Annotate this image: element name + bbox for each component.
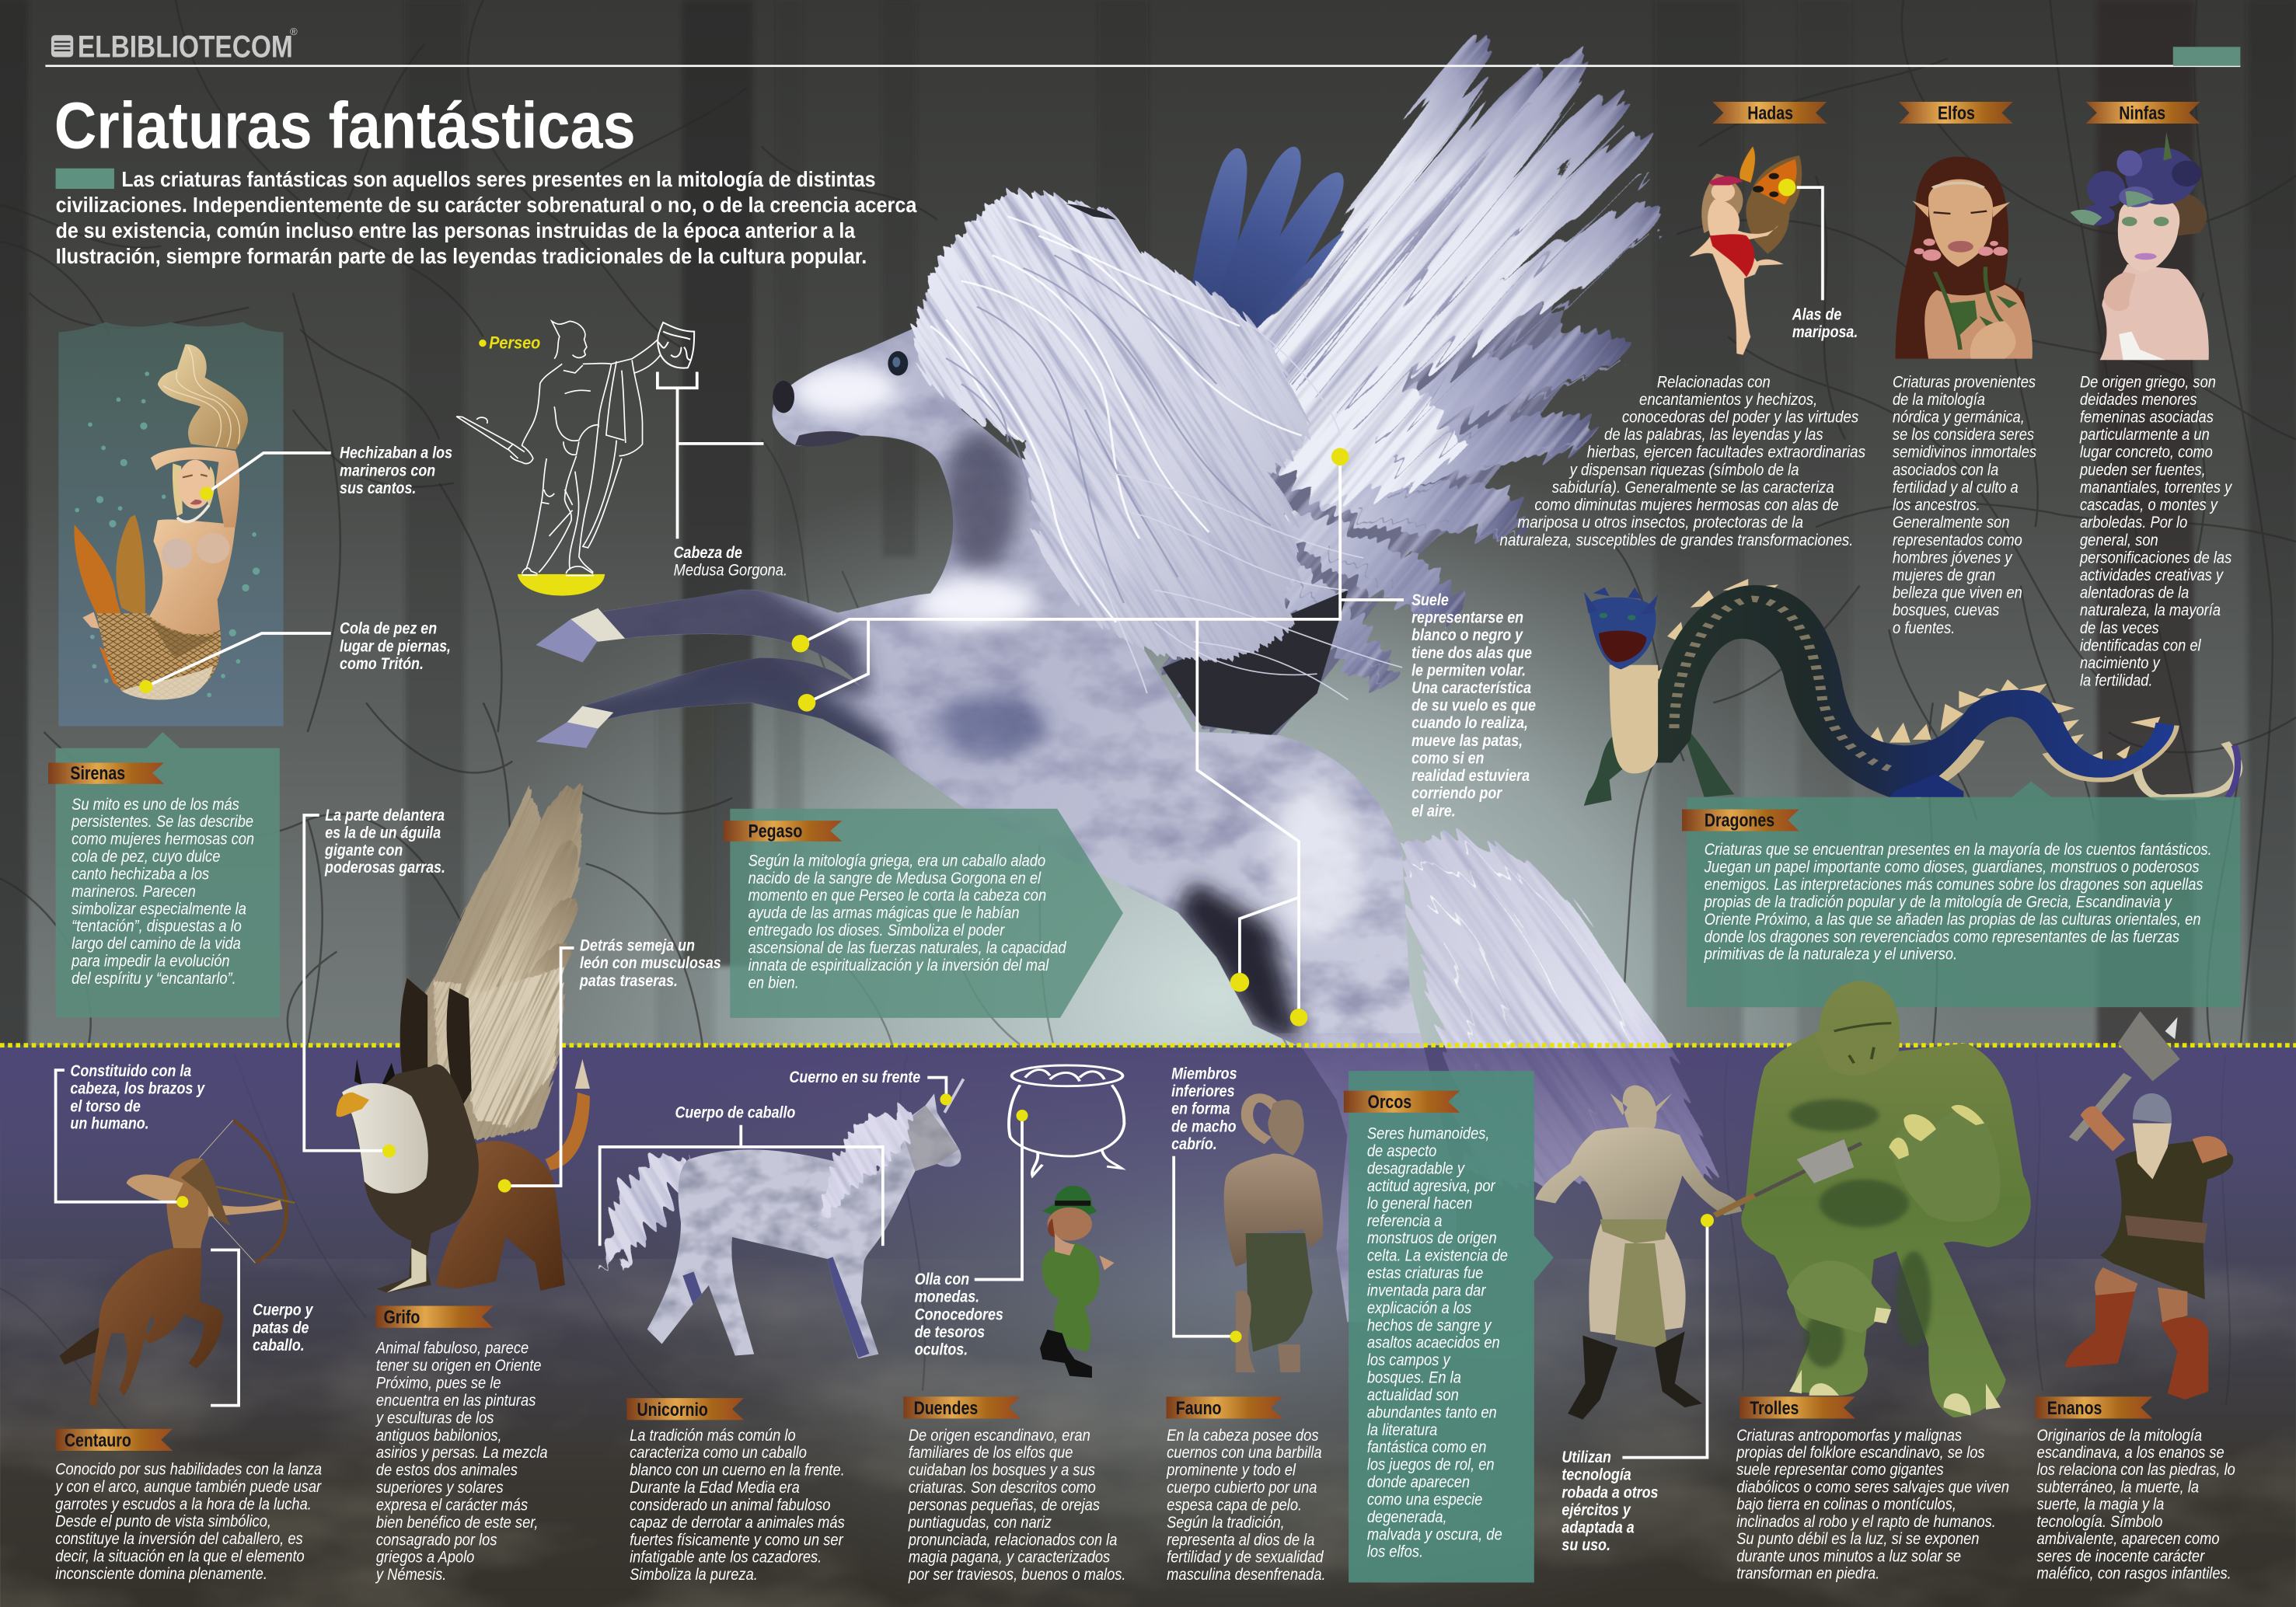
callout: suele representarse: blanco o negro y <box>1411 626 1523 645</box>
panel text: grifo: expresa el carácter más <box>376 1496 528 1515</box>
panel: orcos: los juegos de rol, en <box>1367 1455 1495 1474</box>
panel: pegaso: innata de espiritualización y la inversión del mal <box>748 957 1049 974</box>
orco callout: adaptada a <box>1561 1518 1635 1537</box>
panel text: enanos: ambivalente, aparecen como <box>2037 1530 2220 1549</box>
panel text: trolles: Su punto débil es la luz, si se exponen <box>1736 1530 1979 1549</box>
grifo callouts: gigante con <box>324 842 403 860</box>
text: hadas: como diminutas mujeres hermosas con alas de <box>1534 496 1839 514</box>
panel: orcos <box>1344 1071 1554 1583</box>
sirena callouts: Hechizaban a los <box>340 444 452 462</box>
panel text: centauro: Desde el punto de vista simbólico, <box>55 1513 271 1531</box>
callout: suele representarse: realidad estuviera <box>1411 767 1530 785</box>
elfos column: o fuentes. <box>1893 619 1955 637</box>
panel text: duendes <box>903 1396 1126 1584</box>
elfos column: Generalmente son <box>1893 514 2010 532</box>
elfos column: Criaturas provenientes <box>1893 373 2036 392</box>
panel text: unicornio: Unicornio <box>637 1399 708 1420</box>
panel: sirenas: Su mito es uno de los más <box>72 796 239 814</box>
panel text: grifo: antiguos babilonios, <box>376 1427 502 1445</box>
perseo line drawing <box>456 321 694 596</box>
ninfas column: arboledas. Por lo <box>2080 514 2187 532</box>
intro text: de su existencia, común incluso entre las personas instruidas de la época anterior a la <box>56 218 856 242</box>
panel text: centauro: decir, la situación en la que el elemento <box>55 1547 305 1566</box>
callout: suele representarse: le permiten volar. <box>1411 661 1526 680</box>
panel: sirenas: como mujeres hermosas con <box>72 830 254 849</box>
panel text: centauro: constituye la inversión del caballero, es <box>55 1530 303 1549</box>
panel text: grifo: superiores y solares <box>376 1479 504 1497</box>
panel text: grifo: y Némesis. <box>375 1566 446 1584</box>
panel text: unicornio: blanco con un cuerno en la frente. <box>630 1461 845 1480</box>
panel text: fauno: representa al dios de la <box>1167 1531 1314 1549</box>
panel: orcos: los campos y <box>1367 1351 1451 1370</box>
olla y duende illustration <box>1009 1065 1124 1378</box>
grifo callouts: león con musculosas <box>580 954 721 973</box>
panel: orcos: actitud agresiva, por <box>1367 1177 1496 1195</box>
elfos column: belleza que viven en <box>1893 584 2022 602</box>
orco callout <box>1561 1214 1714 1555</box>
panel: pegaso: momento en que Perseo le corta la cabeza con <box>748 887 1046 905</box>
orco callout: robada a otros <box>1561 1483 1659 1502</box>
panel text: fauno: cuerpo cubierto por una <box>1167 1479 1317 1497</box>
panel text: centauro: inconsciente domina plenamente. <box>55 1565 267 1583</box>
callout: suele representarse: representarse en <box>1411 608 1523 627</box>
icon: elfo <box>1896 157 2033 359</box>
sirena callouts: lugar de piernas, <box>340 637 451 656</box>
orco callout: ejércitos y <box>1561 1501 1631 1519</box>
panel text: centauro: Conocido por sus habilidades con la lanza <box>55 1460 322 1479</box>
sirena callouts: marineros con <box>340 462 435 480</box>
olla callouts <box>915 1110 1028 1359</box>
panel text: duendes: pronunciada, relacionados con la <box>908 1531 1117 1549</box>
text: hadas: naturaleza, susceptibles de grandes transformaciones. <box>1500 531 1853 549</box>
unicornio callouts <box>600 1068 952 1246</box>
ninfas column: De origen griego, son <box>2080 373 2216 392</box>
callout: suele representarse: Una característica <box>1411 679 1531 697</box>
panel text: enanos: suerte, la magia y la <box>2037 1495 2164 1514</box>
panel: orcos: donde aparecen <box>1367 1473 1470 1491</box>
ninfas column: deidades menores <box>2080 391 2197 409</box>
back blue wing <box>1171 140 1386 418</box>
panel text: grifo: bien benéfico de este ser, <box>376 1514 538 1532</box>
panel text: fauno: masculina desenfrenada. <box>1167 1566 1326 1584</box>
panel: pegaso: Pegaso <box>748 821 802 842</box>
panel text: fauno: En la cabeza posee dos <box>1167 1427 1319 1445</box>
olla callouts: ocultos. <box>915 1340 968 1359</box>
panel: orcos: lo general hacen <box>1367 1194 1472 1213</box>
panel text: duendes: magia pagana, y caracterizados <box>909 1548 1110 1567</box>
olla callouts: Conocedores <box>915 1305 1003 1324</box>
grifo callouts: es la de un águila <box>325 824 441 842</box>
callout: suele representarse: cuando lo realiza, <box>1411 714 1528 733</box>
centauro callouts: caballo. <box>253 1337 305 1354</box>
orco callout: tecnología <box>1561 1466 1631 1484</box>
panel: dragones: Juegan un papel importante como dioses, guardianes, monstruos o poderosos <box>1704 858 2200 877</box>
centauro callouts: un humano. <box>70 1114 149 1133</box>
ninfas column: nacimiento y <box>2080 654 2161 672</box>
panel: orcos: inventada para dar <box>1367 1281 1487 1300</box>
panel text: grifo: Animal fabuloso, parece <box>375 1339 529 1358</box>
grifo callouts: La parte delantera <box>325 807 445 824</box>
panel text: trolles: transforman en piedra. <box>1736 1564 1879 1583</box>
purple overlay band <box>0 1048 2296 1487</box>
ninfas column: naturaleza, la mayoría <box>2080 601 2221 620</box>
elfos column: semidivinos inmortales <box>1893 444 2036 462</box>
elfos column <box>1893 102 2036 637</box>
elfos column: nórdica y germánica, <box>1893 408 2025 427</box>
text: hadas: de las palabras, las leyendas y las <box>1604 425 1823 444</box>
ninfas column: personificaciones de las <box>2079 549 2231 567</box>
panel: dragones: Oriente Próximo, a las que se añaden las propias de las culturas orientales, en <box>1705 911 2201 929</box>
orco callout: Utilizan <box>1561 1448 1611 1466</box>
callout: cabeza de medusa: Medusa Gorgona. <box>674 561 787 580</box>
text: hadas: Relacionadas con <box>1657 372 1771 391</box>
unicornio callouts: Cuerpo de caballo <box>675 1103 795 1122</box>
text: hadas: conocedoras del poder y las virtudes <box>1622 408 1859 427</box>
fauno callouts: inferiores <box>1171 1082 1235 1100</box>
panel text: trolles: Criaturas antropomorfas y malignas <box>1736 1427 1962 1445</box>
panel text: duendes: De origen escandinavo, eran <box>909 1427 1090 1445</box>
panel text: unicornio: Durante la Edad Media era <box>630 1479 800 1497</box>
grifo callouts: Detrás semeja un <box>580 936 695 955</box>
panel: pegaso: entregado los dioses. Simboliza el poder <box>748 922 1006 939</box>
ninfas column: cascadas, o montes y <box>2080 496 2218 514</box>
panel: pegaso: en bien. <box>748 974 799 992</box>
panel: orcos: Orcos <box>1368 1091 1411 1113</box>
panel text: unicornio: La tradición más común lo <box>630 1427 796 1445</box>
panel: orcos: actualidad son <box>1367 1386 1459 1404</box>
panel: dragones: Criaturas que se encuentran presentes en la mayoría de los cuentos fantásticos. <box>1705 841 2212 859</box>
panel text: grifo: griegos a Apolo <box>376 1548 474 1567</box>
ninfas column: la fertilidad. <box>2080 671 2153 690</box>
panel: sirenas: canto hechizaba a los <box>72 865 209 884</box>
panel text: fauno: Según la tradición, <box>1167 1514 1285 1532</box>
hadas column: Hadas <box>1747 102 1793 124</box>
panel text: grifo: asirios y persas. La mezcla <box>376 1444 548 1462</box>
panel text: grifo: tener su origen en Oriente <box>376 1357 541 1375</box>
elfos column: mujeres de gran <box>1893 566 1995 584</box>
panel: orcos: malvada y oscura, de <box>1367 1525 1502 1544</box>
panel text: trolles <box>1736 1396 2009 1583</box>
fauno callouts <box>1171 1065 1242 1343</box>
title: Criaturas fantásticas <box>54 88 636 162</box>
panel: sirenas: Sirenas <box>70 762 125 784</box>
elfos column: de la mitología <box>1893 391 1985 409</box>
centauro callouts: el torso de <box>70 1097 141 1116</box>
panel text: trolles: Trolles <box>1750 1397 1799 1418</box>
panel: dragones: donde los dragones son reverenciados como representantes de las fuerzas <box>1705 928 2179 946</box>
panel: orcos: la literatura <box>1367 1421 1437 1439</box>
callout: suele representarse: el aire. <box>1411 802 1456 821</box>
panel text: duendes: puntiagudas, con nariz <box>908 1514 1052 1532</box>
ninfas column: alentadoras de la <box>2080 584 2189 602</box>
panel text: centauro: Centauro <box>65 1429 131 1451</box>
panel text: centauro <box>54 1429 322 1583</box>
sirena illustration panel <box>58 322 284 726</box>
panel text: enanos: subterráneo, la muerte, la <box>2037 1478 2199 1497</box>
sirena callouts: Cola de pez en <box>340 619 437 638</box>
panel: sirenas: largo del camino de la vida <box>72 935 241 953</box>
header rule and tab <box>45 47 2240 66</box>
sirena callouts <box>139 444 452 693</box>
pegaso illustration <box>497 0 2021 1376</box>
intro text: civilizaciones. Independientemente de su carácter sobrenatural o no, o de la creencia acerca <box>56 193 917 217</box>
fauno callouts: de macho <box>1171 1117 1237 1136</box>
elfos column: fertilidad y al culto a <box>1893 479 2019 497</box>
header: logo: ELBIBLIOTECOM <box>78 30 293 64</box>
ninfas column: general, son <box>2080 532 2158 549</box>
panel text: fauno: fertilidad y de sexualidad <box>1167 1548 1324 1567</box>
yellow dashed divider <box>0 1044 2296 1047</box>
panel: orcos: de aspecto <box>1367 1142 1436 1160</box>
panel text: duendes: cuidaban los bosques y a sus <box>909 1461 1095 1480</box>
panel text: fauno: cuernos con una barbilla <box>1167 1444 1322 1462</box>
panel text: grifo: Grifo <box>384 1306 420 1328</box>
ninfas column: particularmente a un <box>2079 426 2210 444</box>
fauno callouts: en forma <box>1171 1100 1230 1118</box>
callout: suele representarse: de su vuelo es que <box>1411 696 1536 715</box>
text: hadas: sabiduría). Generalmente se las caracteriza <box>1552 478 1834 497</box>
ninfas column <box>2071 102 2232 690</box>
panel: sirenas: persistentes. Se las describe <box>71 813 253 831</box>
hadas column <box>1500 102 1865 549</box>
ninfas column: lugar concreto, como <box>2080 444 2213 462</box>
panel text: unicornio: capaz de derrotar a animales más <box>630 1514 845 1532</box>
panel text: grifo: y esculturas de los <box>375 1409 494 1427</box>
unicornio callouts: Cuerno en su frente <box>789 1068 920 1087</box>
intro text <box>56 167 917 268</box>
troll illustration <box>1715 981 2031 1417</box>
panel text: centauro: y con el arco, aunque también puede usar <box>54 1478 322 1496</box>
panel text: fauno: prominente y todo el <box>1166 1461 1296 1480</box>
panel: orcos: explicación a los <box>1367 1299 1471 1317</box>
ninfas column: Ninfas <box>2119 102 2165 124</box>
panel text: unicornio: considerado un animal fabuloso <box>630 1496 830 1515</box>
callout: suele representarse: tiene dos alas que <box>1411 643 1532 662</box>
centauro callouts: Cuerpo y <box>253 1301 314 1319</box>
panel text: grifo: de estos dos animales <box>376 1461 518 1480</box>
icon: hada <box>1689 146 1802 355</box>
panel: orcos: estas criaturas fue <box>1367 1264 1483 1282</box>
panel: orcos: desagradable y <box>1367 1159 1465 1178</box>
panel: sirenas: “tentación”, dispuestas a lo <box>72 918 242 936</box>
callout: cabeza de medusa: Cabeza de <box>674 543 742 562</box>
panel text: enanos: Originarios de la mitología <box>2037 1427 2202 1445</box>
panel: orcos: monstruos de origen <box>1367 1229 1497 1248</box>
panel: dragones <box>1682 781 2240 1007</box>
grifo callouts: patas traseras. <box>579 971 678 990</box>
icon: ninfa <box>2071 132 2209 360</box>
enano illustration <box>2065 1011 2233 1400</box>
pegaso callout lines <box>792 448 1404 1027</box>
panel: orcos: celta. La existencia de <box>1367 1246 1508 1265</box>
grifo callouts <box>304 807 721 1192</box>
panel text: trolles: durante unos minutos a luz solar se <box>1736 1547 1961 1566</box>
grifo callouts: poderosas garras. <box>324 858 445 877</box>
olla callouts: Olla con <box>915 1271 969 1289</box>
panel: orcos: fantástica como en <box>1367 1438 1486 1457</box>
sirena callouts: sus cantos. <box>340 479 416 497</box>
panel text: enanos: seres de inocente carácter <box>2037 1547 2205 1566</box>
panel: pegaso: Según la mitología griega, era un caballo alado <box>748 852 1045 870</box>
panel text: unicornio: fuertes físicamente y como un ser <box>630 1531 844 1549</box>
elfos column: Elfos <box>1938 102 1975 124</box>
orco illustration <box>1535 1086 1742 1420</box>
elfos column: los ancestros. <box>1893 496 1980 514</box>
panel text: enanos: escandinava, a los enanos se <box>2037 1444 2224 1462</box>
panel: pegaso: ascensional de las fuerzas naturales, la capacidad <box>748 939 1066 957</box>
panel: orcos: Seres humanoides, <box>1367 1124 1490 1143</box>
olla callouts: de tesoros <box>915 1323 985 1341</box>
elfos column: bosques, cuevas <box>1893 601 1999 620</box>
label: perseo: Perseo <box>489 333 540 352</box>
panel: sirenas <box>48 732 280 1017</box>
panel text: unicornio: infatigable ante los cazadores. <box>630 1548 822 1567</box>
panel text: enanos: maléfico, con rasgos infantiles. <box>2037 1564 2231 1583</box>
panel text: fauno: espesa capa de pelo. <box>1167 1496 1302 1515</box>
panel: pegaso: ayuda de las armas mágicas que le habían <box>748 904 1020 922</box>
panel text: trolles: propias del folklore escandinavo, se los <box>1736 1444 1985 1462</box>
elfos column: representados como <box>1893 532 2022 549</box>
panel: dragones: enemigos. Las interpretaciones más comunes sobre los dragones son aquellas <box>1705 876 2204 894</box>
centauro callouts: patas de <box>252 1319 309 1337</box>
fauno callouts: Miembros <box>1171 1065 1237 1083</box>
panel: orcos: degenerada, <box>1367 1508 1447 1526</box>
panel: sirenas: para impedir la evolución <box>71 952 230 971</box>
panel: pegaso <box>724 809 1123 1018</box>
panel text: unicornio: Simboliza la pureza. <box>630 1566 758 1584</box>
callout: suele representarse: corriendo por <box>1411 784 1502 803</box>
panel: pegaso: nacido de la sangre de Medusa Gorgona en el <box>748 870 1042 887</box>
fauno callouts: cabrío. <box>1171 1135 1217 1153</box>
olla callouts: monedas. <box>915 1288 979 1306</box>
panel: sirenas: del espíritu y “encantarlo”. <box>72 970 236 988</box>
text: hadas: mariposa u otros insectos, protectoras de la <box>1517 513 1803 532</box>
panel: orcos: asaltos acaecidos en <box>1367 1333 1500 1352</box>
panel: dragones: Dragones <box>1705 809 1774 831</box>
panel: sirenas: cola de pez, cuyo dulce <box>72 848 220 866</box>
elfos column: hombres jóvenes y <box>1893 549 2013 567</box>
text: hadas: encantamientos y hechizos, <box>1639 390 1817 409</box>
elfos column: se los considera seres <box>1893 426 2034 444</box>
grifo illustration <box>278 712 732 1292</box>
hadas column: mariposa. <box>1792 323 1858 342</box>
panel: sirenas: marineros. Parecen <box>72 883 196 901</box>
callout: suele representarse: Suele <box>1411 591 1449 609</box>
panel text: trolles: bajo tierra en colinas o montículos, <box>1736 1495 1956 1514</box>
panel: dragones: propias de la tradición popular y de la mitología de Grecia, Escandinavia y <box>1704 893 2172 912</box>
panel text: duendes: personas pequeñas, de orejas <box>908 1496 1100 1515</box>
panel text: enanos <box>2036 1396 2235 1583</box>
panel: orcos: bosques. En la <box>1367 1368 1461 1387</box>
panel: orcos: hechos de sangre y <box>1367 1316 1492 1335</box>
panel text: unicornio <box>626 1398 845 1584</box>
header: logo: ® <box>290 26 298 37</box>
panel text: duendes: por ser traviesos, buenos o malos. <box>908 1566 1126 1584</box>
panel text: duendes: Duendes <box>914 1397 978 1418</box>
ninfas column: pueden ser fuentes, <box>2079 461 2206 479</box>
panel text: fauno <box>1166 1396 1326 1584</box>
panel text: enanos: los relaciona con las piedras, lo <box>2037 1461 2235 1480</box>
panel text: grifo: Próximo, pues se le <box>376 1374 501 1393</box>
panel text: fauno: Fauno <box>1176 1397 1222 1418</box>
callout: suele representarse: como si en <box>1411 749 1484 768</box>
panel: orcos: referencia a <box>1367 1212 1442 1230</box>
panel: orcos: como una especie <box>1367 1490 1482 1509</box>
elfos column: asociados con la <box>1893 461 1998 479</box>
ninfas column: actividades creativas y <box>2080 566 2224 584</box>
front wing <box>815 0 2021 987</box>
ninfas column: femeninas asociadas <box>2080 408 2214 427</box>
panel text: duendes: criaturas. Son descritos como <box>909 1479 1096 1497</box>
panel text: centauro: garrotes y escudos a la hora de la lucha. <box>55 1495 312 1514</box>
centauro callouts: Constituido con la <box>70 1062 191 1080</box>
tail <box>1241 690 1880 1332</box>
centauro callouts: cabeza, los brazos y <box>70 1079 205 1098</box>
centauro illustration <box>60 1121 295 1407</box>
panel text: unicornio: caracteriza como un caballo <box>630 1444 807 1462</box>
ninfas column: de las veces <box>2080 619 2159 637</box>
intro text: Ilustración, siempre formarán parte de las leyendas tradicionales de la cultura popular. <box>56 244 867 268</box>
ninfas column: identificadas con el <box>2080 636 2201 655</box>
panel: orcos: los elfos. <box>1367 1543 1423 1561</box>
intro text: Las criaturas fantásticas son aquellos seres presentes en la mitología de distintas <box>121 167 876 191</box>
panel text: enanos: Enanos <box>2047 1397 2102 1418</box>
unicornio illustration <box>598 1079 965 1358</box>
panel text: enanos: tecnología. Símbolo <box>2037 1513 2162 1531</box>
panel text: trolles: diabólicos o como seres salvajes que viven <box>1736 1478 2009 1497</box>
text: hadas <box>1500 372 1865 549</box>
text: hadas: hierbas, ejercen facultades extraordinarias <box>1587 443 1865 462</box>
dragon illustration <box>1584 579 2238 806</box>
text: hadas: y dispensan riquezas (símbolo de la <box>1568 460 1799 479</box>
callout: cabeza de medusa <box>658 372 787 580</box>
hadas column: Alas de <box>1792 305 1841 324</box>
sirena callouts: como Tritón. <box>340 655 424 673</box>
panel text: grifo: encuentra en las pinturas <box>376 1392 536 1410</box>
centauro callouts <box>56 1062 314 1406</box>
panel: sirenas: simbolizar especialmente la <box>72 900 246 919</box>
orco callout: su uso. <box>1561 1536 1610 1555</box>
panel text: grifo: consagrado por los <box>376 1531 497 1549</box>
panel: dragones: primitivas de la naturaleza y el universo. <box>1704 946 1957 964</box>
panel: orcos: abundantes tanto en <box>1367 1403 1497 1422</box>
mane <box>683 57 1542 796</box>
ninfas column: manantiales, torrentes y <box>2080 479 2232 497</box>
panel text: trolles: inclinados al robo y el rapto de humanos. <box>1736 1513 1996 1531</box>
panel text: duendes: familiares de los elfos que <box>909 1444 1073 1462</box>
horse body <box>536 326 1429 1323</box>
panel text: grifo <box>375 1305 548 1584</box>
fauno illustration <box>1224 1098 1323 1372</box>
callout: suele representarse: mueve las patas, <box>1411 731 1523 750</box>
panel text: trolles: suele representar como gigantes <box>1736 1461 1944 1480</box>
